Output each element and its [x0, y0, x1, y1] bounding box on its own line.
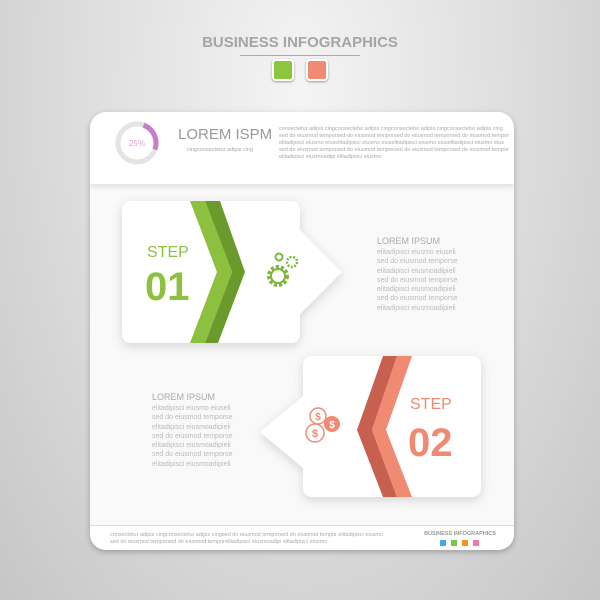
- header: [90, 112, 514, 184]
- text block 2: elitadipisci eiusmoadipieli: [152, 442, 231, 449]
- header text: [279, 126, 509, 160]
- text block 2: LOREM IPSUM: [152, 392, 215, 402]
- footer logo: [424, 531, 496, 546]
- header title: LOREM ISPM: [178, 126, 272, 143]
- step 02 label: [408, 396, 452, 465]
- icon: coins: $: [329, 420, 335, 431]
- header text: sed do eiusmod temporsed do eiusmod temporsed do eiusmod temporsed do eiusmod tempor: [279, 133, 509, 139]
- footer: sed do eiusmod temporsed do eiusmod temporelitadipisci eiusmoadipi elitadipisci eiusmo: [110, 539, 327, 545]
- icon: coins: $: [315, 412, 321, 423]
- text block 1: sed do eiusmod temporse: [377, 295, 458, 302]
- header: cingconsectetur adipis cing: [187, 147, 253, 153]
- icon: coins: $: [312, 428, 318, 440]
- progress ring 25%: [116, 122, 159, 164]
- header text: sed do eiusmod temporsed do eiusmod temporsed do eiusmod temporsed do eiusmod tempor: [279, 147, 509, 153]
- text block 2: sed do eiusmod temporse: [152, 433, 233, 440]
- text block 1: elitadipisci eiusmoadipieli: [377, 286, 456, 293]
- text block 2: sed do eiusmod temporse: [152, 414, 233, 421]
- progress ring 25%: 25%: [129, 139, 145, 148]
- main panel: [90, 112, 514, 550]
- text block 2: elitadipisci eiusmo eiuseli: [152, 405, 231, 412]
- footer: consectetur adipis cingconsectetur adipis cingsed do eiusmod temporsed do eiusmod tempor elitadipisci eiusmo: [110, 532, 383, 538]
- text block 1: sed do eiusmod temporse: [377, 258, 458, 265]
- text block 2: sed do eiusmod temporse: [152, 451, 233, 458]
- step 2 card: [260, 356, 481, 497]
- text block 2: [152, 392, 233, 468]
- step 01 label: STEP: [147, 244, 189, 261]
- text block 2: elitadipisci eiusmoadipieli: [152, 461, 231, 468]
- step 02 label: 02: [408, 421, 452, 465]
- step 01 label: 01: [145, 265, 190, 309]
- icon: coins: [306, 408, 340, 442]
- header text: elitadipisci eiusmoadipi elitadipisci eiusmo: [279, 154, 381, 160]
- text block 1: elitadipisci eiusmo eiuseli: [377, 249, 456, 256]
- chevron green: [190, 201, 245, 343]
- text block 1: sed do eiusmod temporse: [377, 277, 458, 284]
- icon: gears: [269, 254, 297, 285]
- text block 1: elitadipisci eiusmoadipieli: [377, 305, 456, 312]
- footer: [90, 525, 514, 551]
- footer logo: BUSINESS INFOGRAPHICS: [424, 531, 496, 537]
- text block 1: elitadipisci eiusmoadipiell: [377, 268, 456, 275]
- chevron red: [357, 356, 412, 497]
- text block 1: LOREM IPSUM: [377, 236, 440, 246]
- step 01 label: [145, 244, 190, 309]
- header text: consectetur adipis cingconsectetur adipis cingconsectetur adipis cingconsectetur adipis cing: [279, 126, 503, 132]
- text block 1: [377, 236, 458, 312]
- header text: elitadipisci eiusmo eiuselitadipisci eiusmo eiuselitadipisci eiusmo eiuselitadipisci eiusmo eius: [279, 140, 504, 146]
- title: BUSINESS INFOGRAPHICS: [202, 34, 398, 51]
- step 02 label: STEP: [410, 396, 452, 413]
- color swatches: [270, 58, 330, 84]
- text block 2: elitadipisci eiusmoadipieli: [152, 424, 231, 431]
